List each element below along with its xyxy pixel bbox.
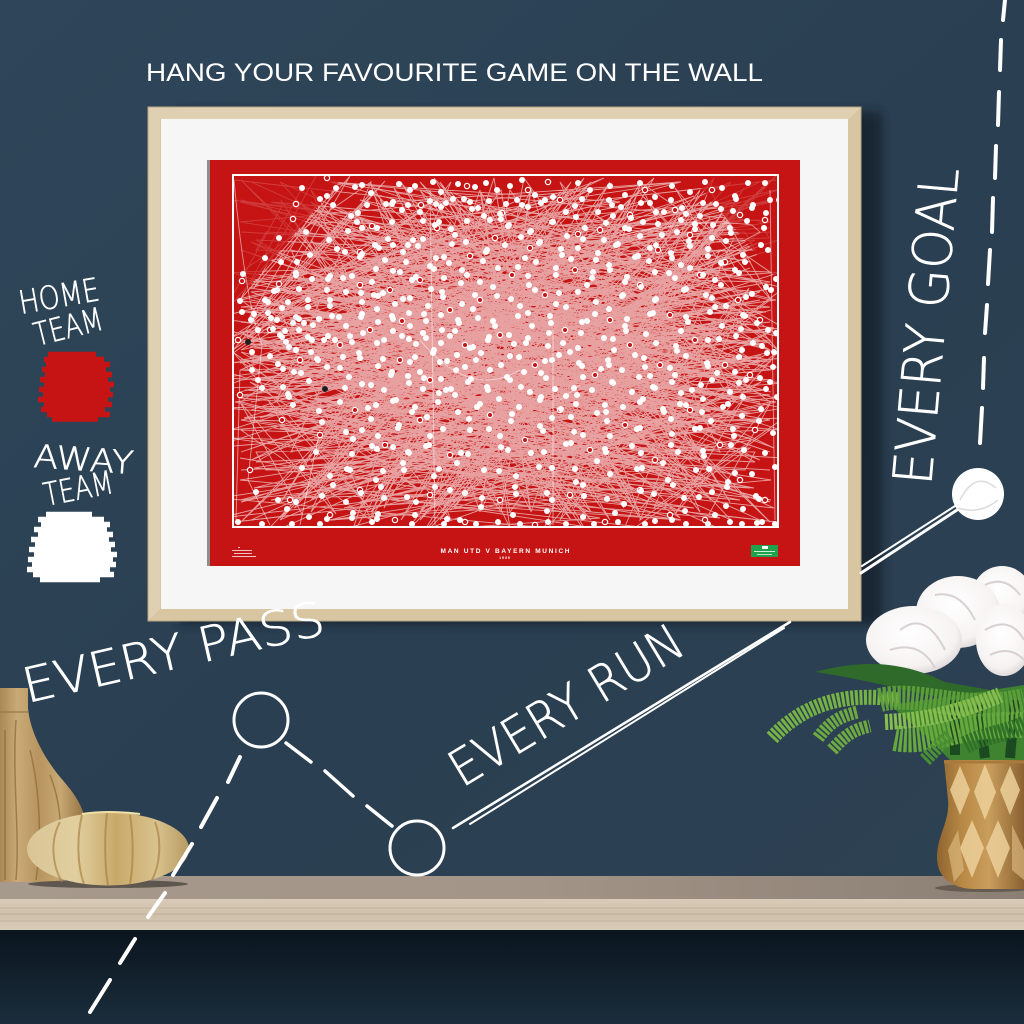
goal dashed path (980, 0, 1005, 443)
tall wooden vase (0, 688, 86, 882)
pitch outline (233, 175, 778, 527)
pass dashed line (90, 757, 240, 1012)
hollow markers (238, 178, 765, 525)
frame shadow (180, 112, 882, 624)
white markers (238, 180, 806, 541)
print title (440, 548, 570, 560)
white mount (161, 119, 848, 609)
print title: MAN UTD V BAYERN MUNICH (440, 548, 570, 555)
sparse corners (233, 175, 778, 305)
pass dashed link (286, 743, 392, 826)
long chalk passes (234, 180, 775, 525)
pass node bottom (390, 821, 444, 875)
legend: home team: TEAM (30, 300, 107, 354)
label: every pass: EVERY PASS (17, 591, 330, 715)
legend: away team: AWAY (32, 437, 135, 482)
red swatch (38, 354, 114, 419)
flowers (772, 566, 1024, 760)
label: every run: EVERY RUN (438, 613, 694, 798)
legend: home team (16, 270, 114, 419)
print title: 1999 (499, 556, 511, 560)
heading: HANG YOUR FAVOURITE GAME ON THE WALL (146, 59, 763, 87)
label: every goal: EVERY GOAL (881, 165, 972, 487)
black markers (248, 342, 325, 389)
red print (210, 160, 800, 566)
white swatch (27, 514, 117, 580)
gold vase (935, 760, 1024, 892)
print legend (232, 547, 256, 557)
legend: away team (27, 437, 135, 580)
round wooden pot (27, 812, 189, 888)
dark leaves (815, 664, 990, 700)
pass node top (234, 693, 288, 747)
publisher badge (751, 545, 778, 557)
print edge shadow (207, 160, 210, 566)
legend: away team: TEAM (40, 463, 116, 514)
shadow strip below shelf (0, 930, 1024, 1024)
shelf (0, 876, 1024, 930)
ball: goal (952, 468, 1004, 520)
fern foliage (772, 685, 1024, 760)
picture frame (148, 107, 861, 621)
pass lines (234, 176, 777, 526)
white roses (866, 566, 1024, 676)
run line upper (861, 506, 957, 573)
match data plot (234, 176, 777, 526)
run line lower (453, 622, 790, 828)
legend: home team: HOME (16, 270, 102, 322)
